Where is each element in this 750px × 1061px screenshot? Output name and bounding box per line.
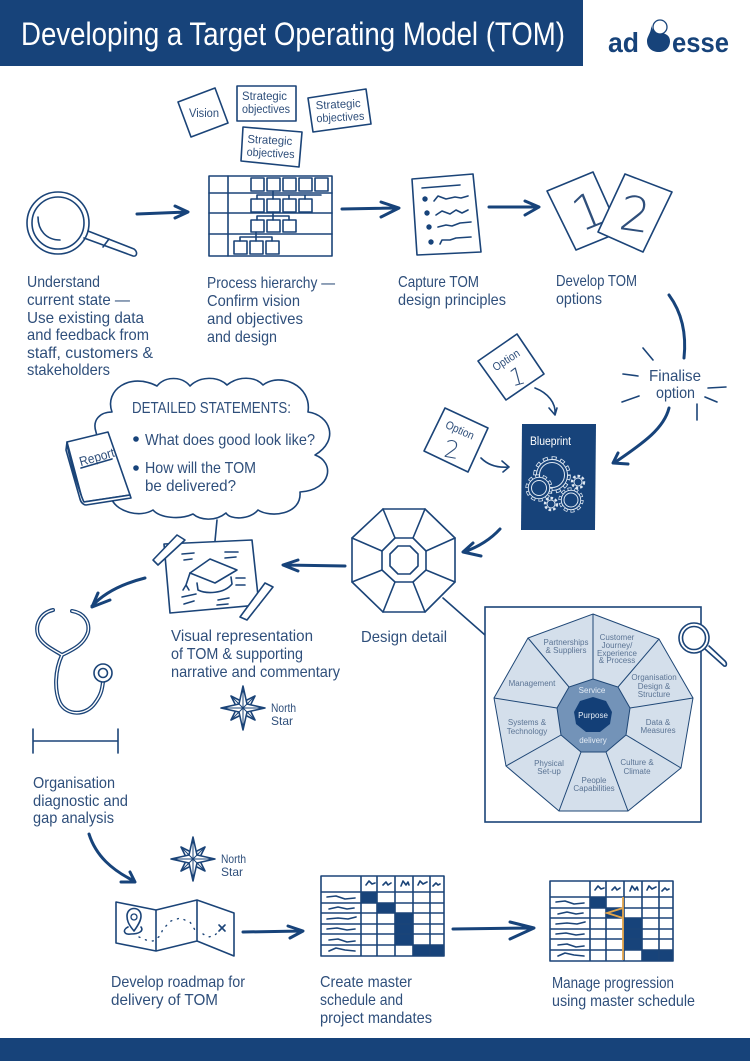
note: vision (178, 88, 228, 137)
callout: finalise option: option (656, 385, 695, 402)
icon: gap ruler (33, 729, 118, 753)
card: option 1: Option (491, 348, 522, 374)
note: strategic objectives three: Strategic (247, 134, 293, 148)
chart: master schedule (321, 876, 444, 956)
icon: octagon design (352, 509, 455, 612)
header banner (0, 0, 583, 66)
cloud: detailed statements: be delivered? (145, 478, 236, 495)
panel: target operating model wheel: People (582, 776, 607, 785)
icon: numbered option cards: 1 (564, 180, 613, 244)
text: visual representation: Visual representation (171, 628, 313, 645)
text: process hierarchy (207, 275, 335, 346)
callout: finalise option: Finalise (649, 368, 701, 385)
chart: nonagon wheel (494, 614, 693, 811)
arrow: roadmap to schedule (243, 926, 303, 938)
text: create master schedule: schedule and (320, 992, 403, 1009)
card: option 2 (424, 408, 488, 472)
panel: target operating model wheel: Systems & (508, 718, 547, 727)
panel: target operating model wheel: Technology (507, 727, 547, 736)
label: north star two: Star (221, 865, 243, 879)
panel: target operating model wheel: Design & (638, 682, 671, 691)
card: option 1: 1 (506, 361, 528, 392)
panel: target operating model wheel: Management (509, 679, 556, 688)
panel: target operating model wheel: Culture & (620, 758, 654, 767)
panel: target operating model wheel: Climate (623, 767, 651, 776)
callout: finalise option (622, 348, 726, 420)
text: process hierarchy: and design (207, 329, 277, 346)
text: organisation diagnostic (33, 775, 128, 827)
panel: target operating model wheel: Measures (640, 726, 676, 735)
panel: target operating model wheel: Capabilities (573, 784, 615, 793)
text: visual representation: narrative and commentary (171, 664, 340, 681)
text: manage progression (552, 975, 695, 1010)
text: visual representation: of TOM & supporting (171, 646, 303, 663)
panel: target operating model wheel: Customer (600, 633, 635, 642)
header banner: Developing a Target Operating Model (TOM) (21, 16, 565, 52)
panel: target operating model wheel: Experience (597, 649, 638, 658)
logo (608, 20, 729, 58)
icon: blueprint gears (527, 458, 584, 511)
icon: principles document (412, 174, 481, 255)
text: capture TOM principles (398, 274, 506, 309)
icon: magnifying glass (27, 192, 137, 256)
label: north star two: North (221, 852, 246, 866)
text: capture TOM principles: Capture TOM (398, 274, 479, 291)
arrow: options to finalise (669, 295, 685, 358)
icon: stethoscope (37, 610, 112, 713)
connector: cloud to poster (215, 520, 217, 541)
text: understand current state: and feedback from (27, 327, 149, 344)
note: strategic objectives one: objectives (242, 104, 290, 116)
text: roadmap (111, 974, 246, 1009)
text: create master schedule: Create master (320, 974, 413, 991)
panel: target operating model wheel: & Process (599, 656, 635, 665)
label: north star two (221, 852, 246, 879)
icon: numbered option cards: 2 (616, 185, 654, 245)
text: visual representation (171, 628, 340, 681)
panel: target operating model wheel: Data & (646, 718, 671, 727)
text: manage progression: Manage progression (552, 975, 674, 992)
cloud: detailed statements: What does good look like? (145, 432, 315, 449)
label: north star one (271, 701, 296, 728)
panel: target operating model wheel (485, 607, 701, 822)
card: option 2: 2 (442, 435, 462, 465)
text: create master schedule (320, 974, 432, 1027)
icon: roadmap (116, 900, 234, 956)
logo: ad (608, 27, 639, 58)
arrow: finalise to blueprint (613, 408, 669, 464)
arrow: option 2 to blueprint (481, 458, 509, 472)
panel: blueprint: Blueprint (530, 436, 572, 448)
text: understand current state: current state — (27, 292, 130, 309)
panel: target operating model wheel: Service (579, 686, 606, 695)
note: strategic objectives two (308, 89, 371, 132)
text: understand current state: staff, customers & (27, 345, 153, 362)
text: manage progression: using master schedule (552, 993, 695, 1010)
connector: octagon to detail panel (443, 598, 485, 635)
card: option 2: Option (443, 419, 476, 442)
icon: small magnifier (679, 623, 726, 666)
cloud: detailed statements (95, 378, 330, 519)
text: organisation diagnostic: diagnostic and (33, 793, 128, 810)
arrow: blueprint to design (463, 529, 500, 556)
note: strategic objectives one (237, 86, 296, 121)
cloud: detailed statements: DETAILED STATEMENTS: (132, 400, 291, 417)
text: design detail: Design detail (361, 629, 447, 646)
note: strategic objectives two: objectives (316, 111, 365, 125)
text: develop TOM options: options (556, 291, 602, 308)
text: develop TOM options: Develop TOM (556, 273, 637, 290)
arrow: design to visual (283, 560, 345, 571)
panel: target operating model wheel: Journey/ (602, 641, 633, 650)
text: roadmap: delivery of TOM (111, 992, 218, 1009)
panel: target operating model wheel: Set-up (537, 767, 561, 776)
arrow: principles to options (489, 201, 539, 215)
card: option 1 (478, 334, 544, 400)
cloud: detailed statements: How will the TOM (145, 460, 256, 477)
text: capture TOM principles: design principles (398, 292, 506, 309)
arrow: diagnostic to roadmap (89, 834, 135, 882)
icon: pinned visual poster (153, 535, 273, 620)
icon: north star one (221, 686, 265, 730)
note: strategic objectives three: objectives (246, 147, 295, 161)
panel: target operating model wheel: Physical (534, 759, 564, 768)
arrow: current state to hierarchy (137, 206, 188, 218)
text: develop TOM options (556, 273, 637, 308)
note: strategic objectives two: Strategic (315, 98, 361, 112)
logo: esse (672, 27, 729, 58)
text: process hierarchy: and objectives (207, 311, 303, 328)
icon: report book (66, 432, 131, 505)
text: organisation diagnostic: gap analysis (33, 810, 114, 827)
panel: target operating model wheel: Organisation (631, 673, 677, 682)
note: strategic objectives one: Strategic (242, 91, 287, 103)
text: understand current state: stakeholders (27, 362, 110, 379)
footer bar (0, 1038, 750, 1061)
text: process hierarchy: Process hierarchy — (207, 275, 335, 292)
icon: report book: Report (77, 445, 116, 469)
panel: blueprint (521, 424, 596, 530)
panel: target operating model wheel: Purpose (578, 711, 608, 720)
arrow: visual to diagnostic (92, 578, 145, 607)
arrow: create to manage (453, 922, 534, 939)
label: north star one: North (271, 701, 296, 715)
text: roadmap: Develop roadmap for (111, 974, 246, 991)
text: understand current state: Understand (27, 274, 100, 291)
panel: target operating model wheel: Structure (638, 690, 671, 699)
text: understand current state: Use existing data (27, 310, 144, 327)
note: vision: Vision (189, 108, 219, 120)
icon: north star two (171, 837, 215, 881)
arrow: hierarchy to principles (342, 202, 399, 217)
chart: managed schedule (550, 881, 673, 961)
panel: target operating model wheel: delivery (579, 736, 607, 745)
icon: numbered option cards (547, 172, 672, 252)
panel: target operating model wheel: Partnerships (544, 638, 588, 647)
label: north star one: Star (271, 714, 293, 728)
panel: target operating model wheel: & Suppliers (546, 646, 586, 655)
note: strategic objectives three (241, 127, 302, 167)
text: organisation diagnostic: Organisation (33, 775, 115, 792)
chart: process hierarchy grid (209, 176, 332, 256)
text: process hierarchy: Confirm vision (207, 293, 300, 310)
text: understand current state (27, 274, 153, 379)
text: create master schedule: project mandates (320, 1010, 432, 1027)
arrow: option 1 to blueprint (535, 388, 557, 415)
